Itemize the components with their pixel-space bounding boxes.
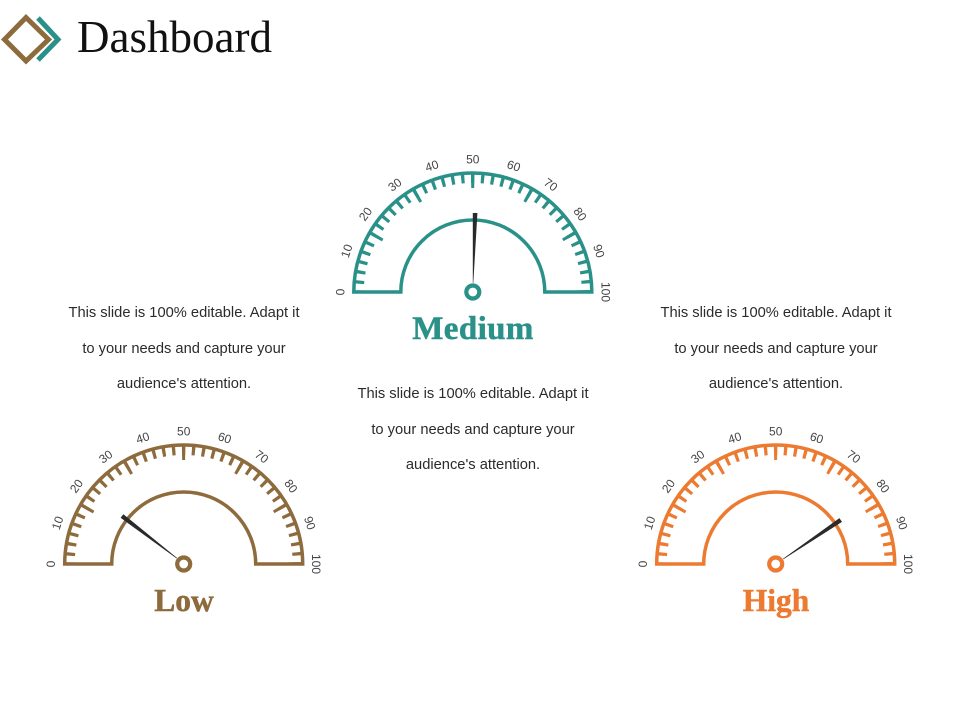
major ticks bbox=[72, 452, 295, 564]
gauge outline bbox=[354, 173, 592, 292]
text block: left: This slide is 100% editable. Adapt it bbox=[68, 305, 300, 321]
scale labels: 30 bbox=[688, 447, 708, 466]
text block: right: This slide is 100% editable. Adapt it bbox=[660, 305, 892, 321]
scale labels: 70 bbox=[541, 175, 560, 195]
scale labels: 60 bbox=[505, 157, 523, 175]
scale labels: 90 bbox=[301, 515, 319, 532]
scale labels: 0 bbox=[636, 560, 650, 567]
scale labels: 10 bbox=[641, 514, 659, 532]
scale labels: 100 bbox=[901, 554, 915, 574]
scale labels: 10 bbox=[338, 242, 356, 260]
scale labels: 80 bbox=[873, 477, 893, 496]
text block: center: This slide is 100% editable. Adapt it bbox=[357, 386, 589, 402]
scale labels: 60 bbox=[216, 429, 233, 447]
text block: right: audience's attention. bbox=[709, 376, 843, 392]
text block: center: audience's attention. bbox=[406, 457, 540, 473]
gauge outline bbox=[657, 445, 895, 564]
scale labels: 20 bbox=[659, 476, 678, 496]
scale labels: 20 bbox=[67, 476, 86, 496]
scale labels bbox=[333, 152, 612, 302]
heading: Low: Low bbox=[154, 583, 214, 618]
needle bbox=[783, 518, 842, 559]
scale labels bbox=[44, 424, 323, 574]
text block: center: to your needs and capture your bbox=[371, 422, 575, 438]
scale labels: 100 bbox=[309, 554, 323, 574]
minor ticks bbox=[70, 450, 298, 564]
text block: left: audience's attention. bbox=[117, 376, 251, 392]
scale labels: 80 bbox=[281, 477, 301, 496]
text block: left: to your needs and capture your bbox=[82, 341, 286, 357]
gauge: Medium bbox=[333, 152, 612, 302]
icon: diamond and chevron bbox=[4, 18, 58, 61]
scale labels: 70 bbox=[844, 447, 863, 467]
scale labels: 90 bbox=[590, 243, 608, 260]
heading: Medium: Medium bbox=[412, 311, 534, 347]
needle bbox=[121, 514, 177, 558]
heading: High: High bbox=[743, 583, 810, 618]
scale labels: 40 bbox=[726, 429, 744, 447]
gauge: High bbox=[636, 424, 915, 574]
hub bbox=[769, 558, 782, 570]
scale labels: 30 bbox=[96, 447, 116, 466]
scale labels: 50 bbox=[466, 152, 480, 166]
scale labels: 50 bbox=[177, 424, 191, 438]
scale labels: 0 bbox=[44, 560, 58, 567]
hub bbox=[177, 558, 190, 570]
scale labels: 40 bbox=[134, 429, 152, 447]
major ticks bbox=[361, 180, 584, 292]
scale labels: 40 bbox=[423, 157, 441, 175]
scale labels: 20 bbox=[356, 204, 375, 224]
scale labels: 80 bbox=[570, 205, 590, 224]
title: Dashboard bbox=[77, 12, 272, 62]
scale labels: 100 bbox=[598, 282, 612, 302]
header bbox=[4, 12, 272, 62]
text block: right bbox=[660, 305, 892, 392]
text block: left bbox=[68, 305, 300, 392]
scale labels: 0 bbox=[333, 288, 347, 295]
scale labels: 70 bbox=[252, 447, 271, 467]
gauge outline bbox=[65, 445, 303, 564]
minor ticks bbox=[359, 178, 587, 292]
hub bbox=[466, 286, 479, 298]
needle bbox=[473, 213, 477, 283]
scale labels: 10 bbox=[49, 514, 67, 532]
minor ticks bbox=[662, 450, 890, 564]
scale labels: 30 bbox=[385, 175, 405, 194]
text block: center bbox=[357, 386, 589, 473]
scale labels: 60 bbox=[808, 429, 825, 447]
major ticks bbox=[664, 452, 887, 564]
scale labels: 90 bbox=[893, 515, 911, 532]
gauge: Low bbox=[44, 424, 323, 574]
scale labels bbox=[636, 424, 915, 574]
text block: right: to your needs and capture your bbox=[674, 341, 878, 357]
scale labels: 50 bbox=[769, 424, 783, 438]
